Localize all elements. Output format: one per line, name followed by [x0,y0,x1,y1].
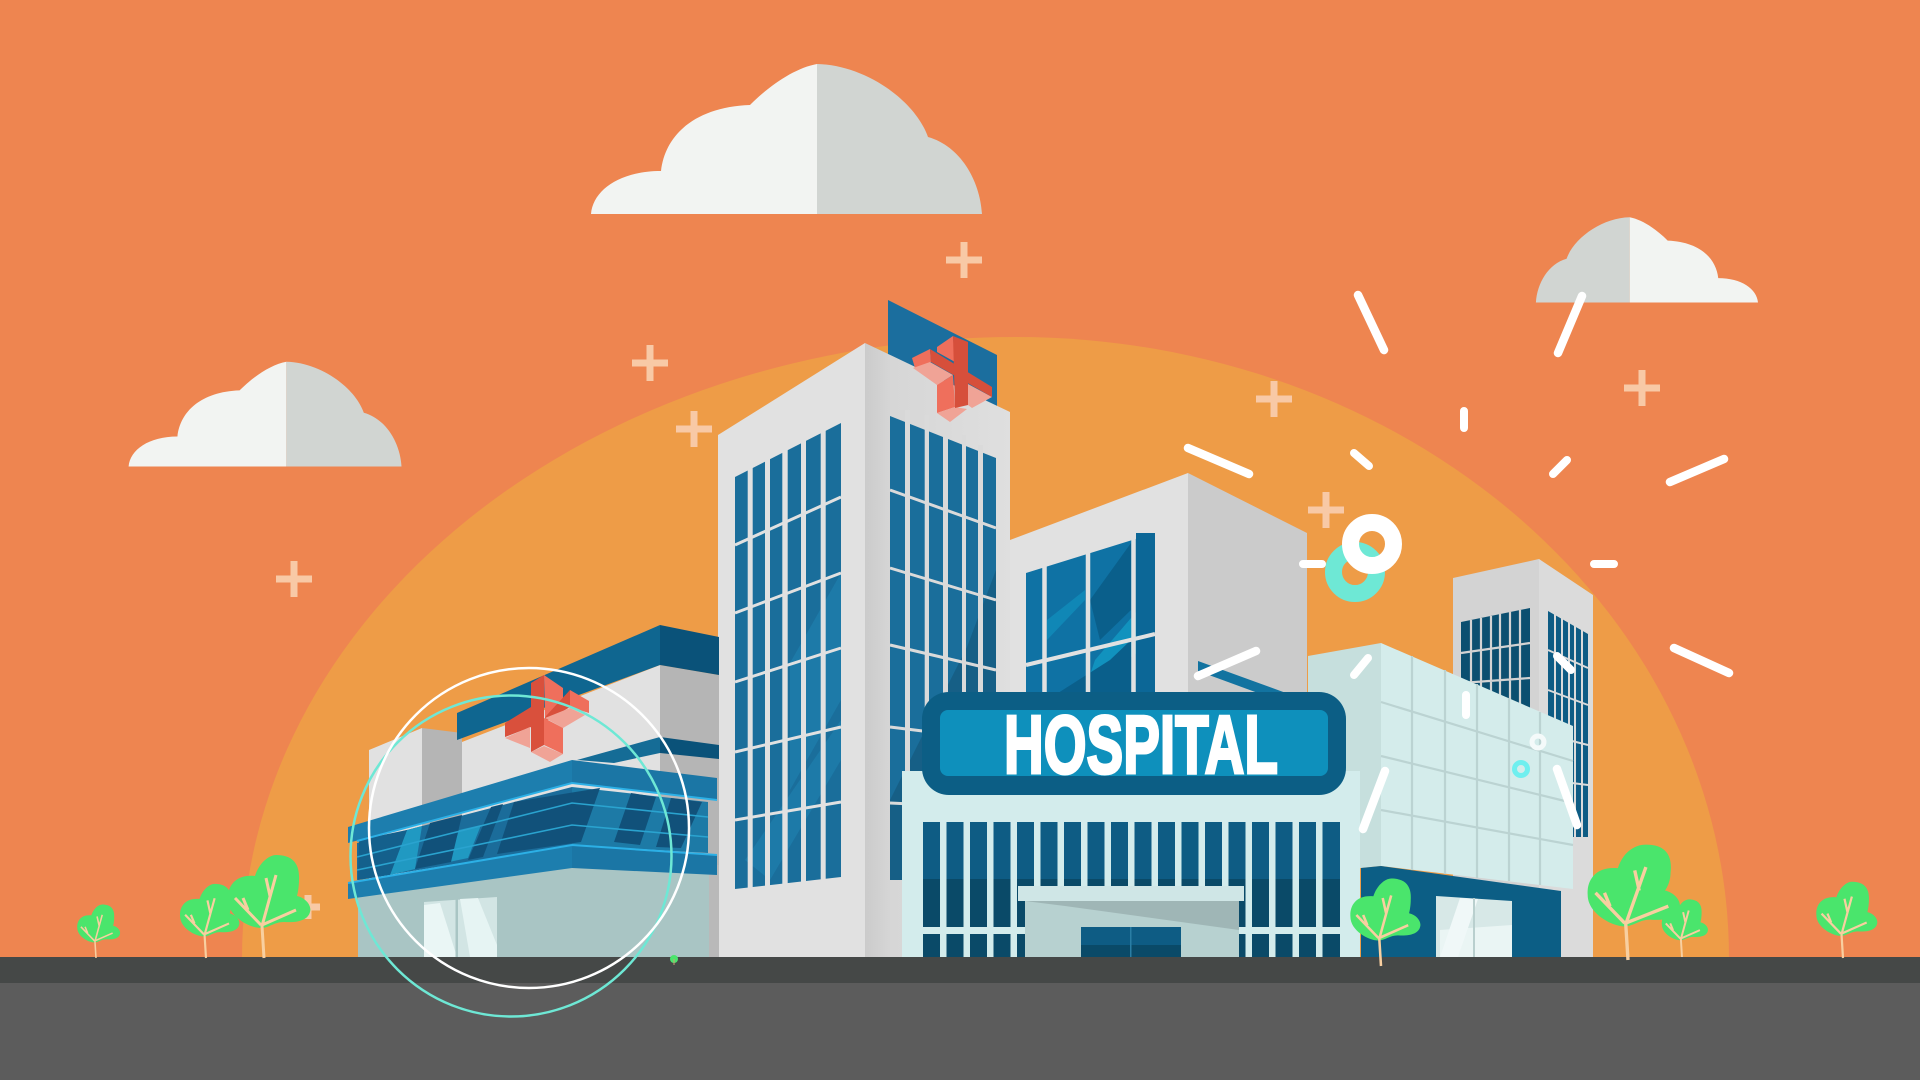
red cross on tower [912,336,992,422]
left block [369,728,422,880]
glass building door [1436,896,1512,957]
dark lower storey [1361,866,1561,957]
front windows [923,822,1340,957]
sun semicircle [242,337,1729,958]
burst: small white ring [1532,736,1544,748]
entrance [1018,886,1244,957]
burst: small cyan ring [1514,762,1528,776]
cloud: large top [591,64,982,214]
blue sign brace [1198,661,1286,693]
cloud: left [129,362,402,466]
tree 4 [1350,878,1420,966]
tree sprout [670,955,678,965]
left building door [424,897,497,957]
tree 7 [1816,882,1877,958]
left building glass [357,787,708,880]
burst: teal outline circle [350,696,672,1016]
hospital sign text: HOSPITAL [1004,698,1278,791]
plus signs [276,242,1660,919]
blue stripe [577,737,660,763]
tree 3 [228,855,310,958]
middle building windows [1026,530,1155,700]
rooftop blue sign panel [888,300,997,410]
tree 6 [1662,899,1708,957]
burst: white dashes [1188,295,1729,829]
cloud: right [1536,217,1758,302]
tree 5 [1588,845,1680,960]
red cross on left building [505,675,589,762]
glass building [1308,643,1573,957]
burst: teal ring [1334,550,1376,594]
canopy top band [348,760,572,843]
canopy bottom band [348,845,572,899]
burst: white ring [1350,522,1394,566]
tree 2 [180,884,239,958]
trees [77,845,1877,966]
tower left windows [735,415,841,900]
hospital front block [902,771,1360,957]
ground [0,957,1920,1080]
back right tower [1453,559,1593,957]
lower wall [358,860,709,957]
burst: white outline circle [369,668,689,988]
tower right windows [890,410,996,890]
main upper wall [462,665,660,880]
hospital sign [922,692,1346,795]
middle building [1010,473,1307,790]
main tower [718,336,1010,957]
left building [348,625,719,957]
tree 1 [77,904,120,958]
roof band [457,625,660,740]
